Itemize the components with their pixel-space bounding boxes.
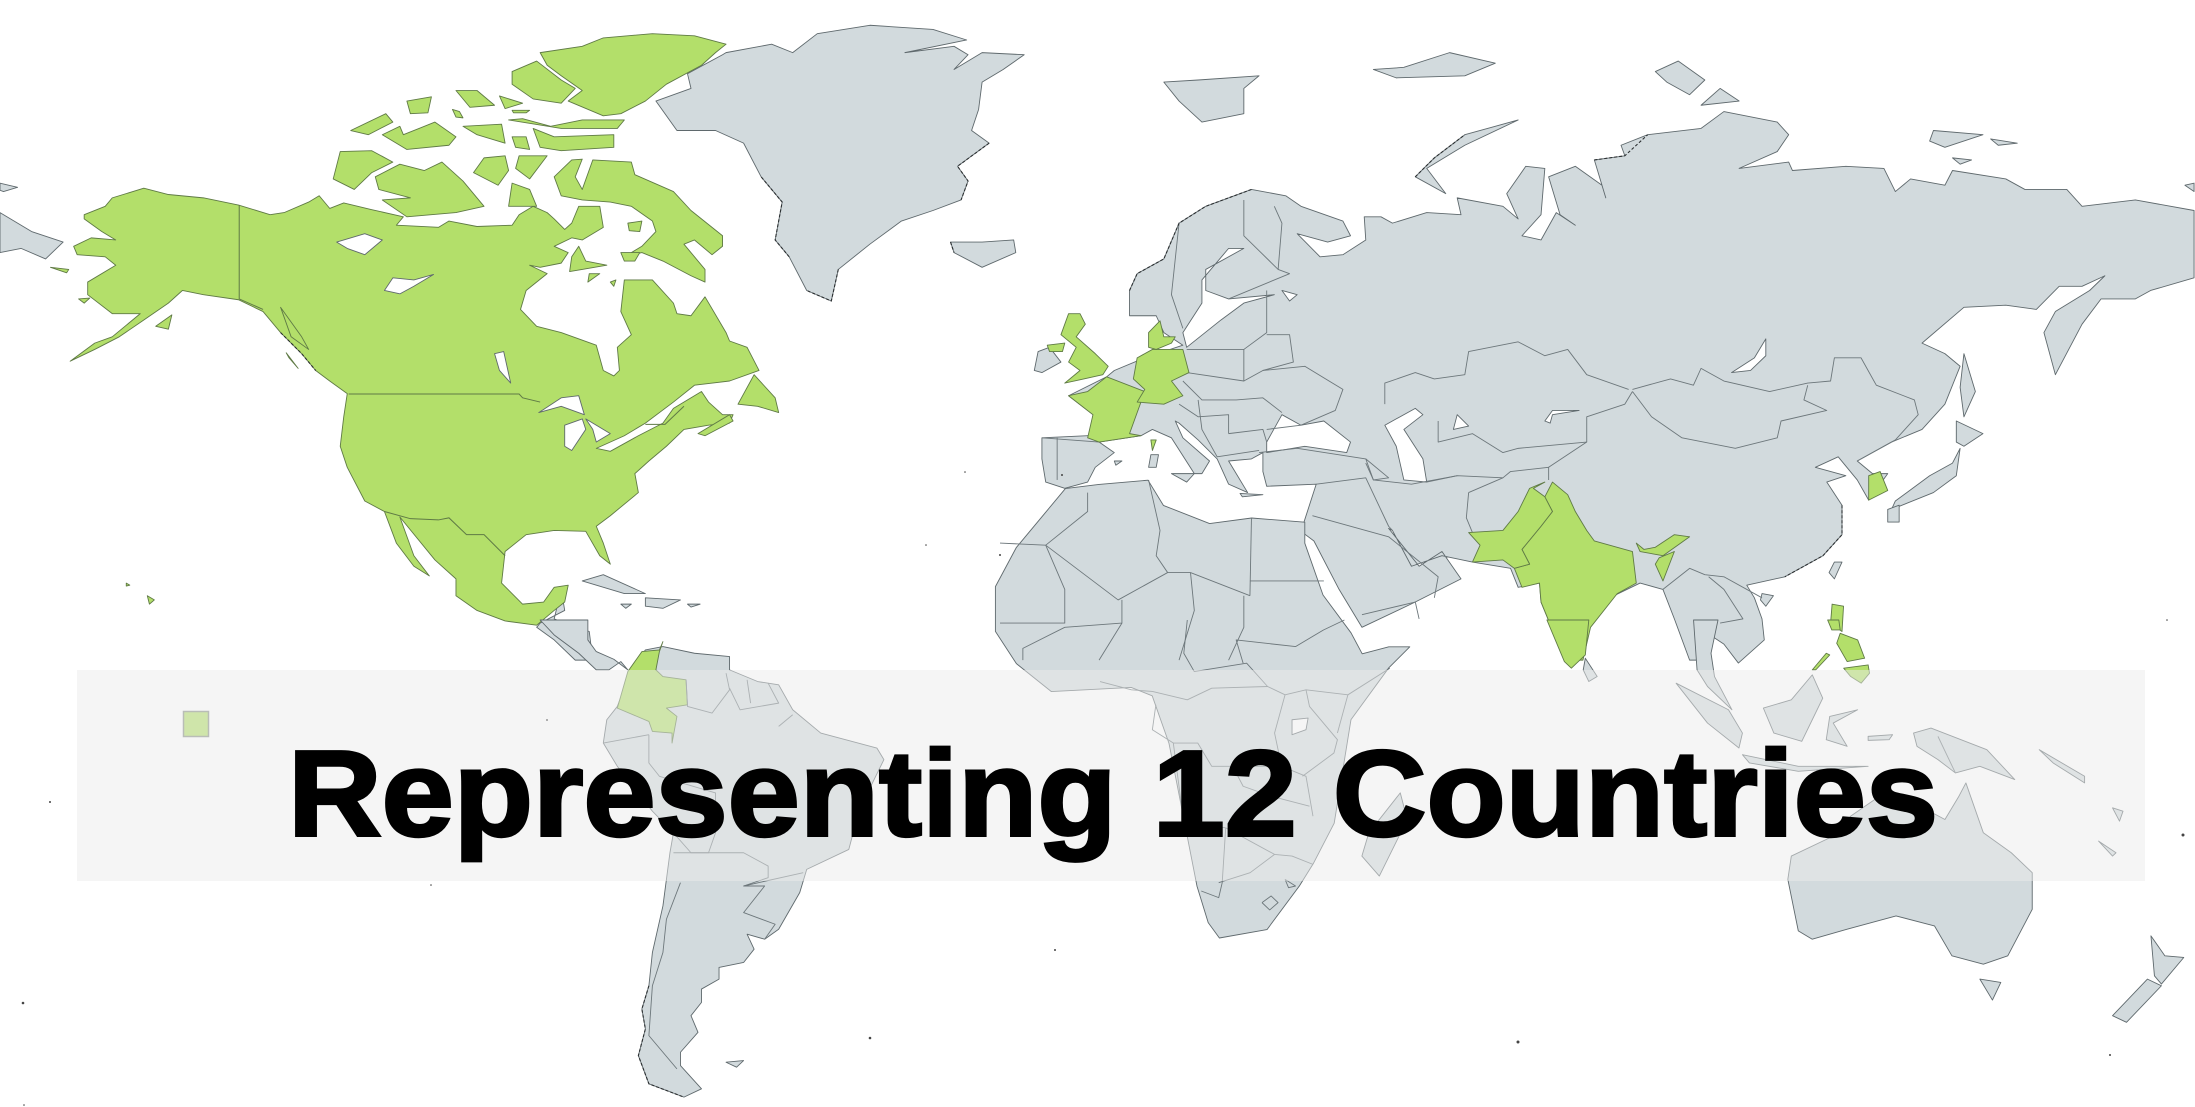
islands: Newfoundland, Nova Scotia, Vancouver Island, Alaska islands, Hawaii (51, 267, 779, 604)
small islands (22, 471, 2185, 1106)
map: inland seas and lakes of Eurasia (1183, 248, 1766, 482)
title: Representing 12 Countries (288, 726, 1938, 862)
country: Denmark (1149, 321, 1175, 349)
map: North American lakes and bays (337, 234, 610, 450)
country: Colombia (617, 642, 687, 743)
country: South Korea (1869, 472, 1888, 500)
map: South America in grey (540, 620, 884, 1097)
countries: Europe and Asia highlighted in green (1047, 314, 1888, 660)
map: Eurasia in grey (1034, 53, 2194, 663)
country: Canada, United States and Mexico mainland (70, 188, 759, 625)
map: North American borders (239, 205, 684, 556)
country: Germany (1133, 349, 1189, 404)
countries: southern India and Philippines islands (1547, 620, 1870, 683)
map: Greenland, Iceland, Caribbean and Chukotka in grey (0, 25, 1024, 660)
map: North America highlighted in green (51, 34, 779, 625)
country: Philippines, Luzon (1831, 604, 1844, 632)
lake: Victoria (1292, 718, 1308, 735)
map: South American borders (603, 673, 803, 1069)
map: Eurasian borders (1042, 200, 1918, 623)
map: fjord coast detail, Eurasia (1130, 135, 1842, 577)
country: India (1514, 482, 1690, 660)
map: fjord coast detail, Americas and Greenland (281, 143, 989, 370)
legend swatch (184, 712, 208, 736)
map: southern Africa borders and Lake Victoria (1100, 620, 1955, 910)
map: Africa in grey (995, 480, 1410, 938)
islands: Canadian Arctic archipelago (333, 34, 726, 286)
map: fjord coast detail, Chile (638, 986, 684, 1097)
islands: Arctic, Japan, Taiwan, Mediterranean (1034, 53, 2194, 606)
country: France (1069, 377, 1156, 450)
country: United Kingdom (1047, 314, 1108, 383)
banner panel (77, 670, 2145, 881)
map: Africa and Arabia borders, north (1000, 480, 1324, 660)
country: Pakistan (1469, 482, 1552, 568)
map: Oceania, southeast Asia and Madagascar in grey (1362, 620, 2184, 1022)
